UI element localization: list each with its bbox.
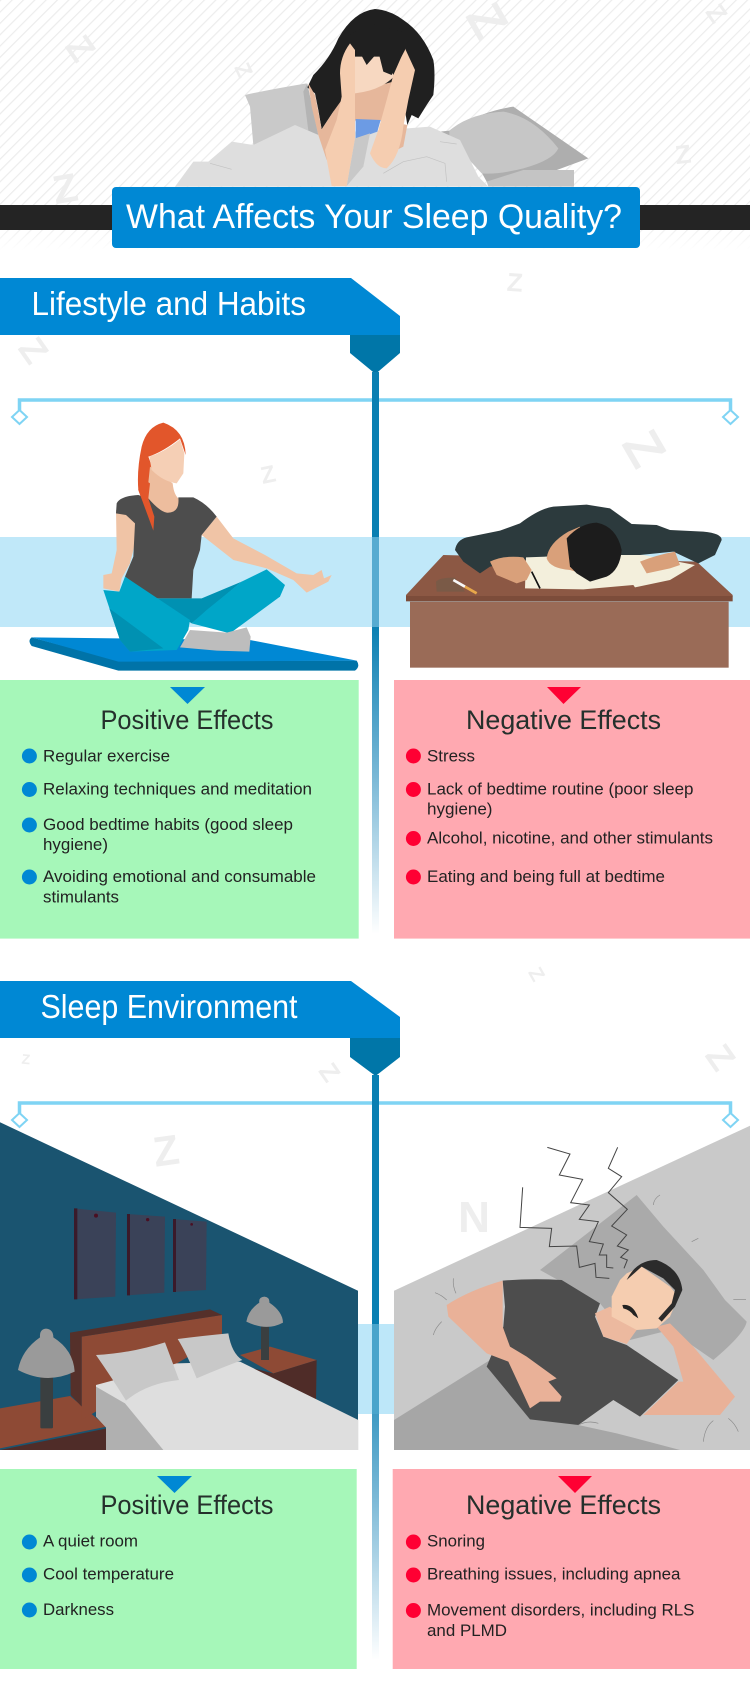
header hatched background: [0, 0, 750, 250]
list: [22, 748, 316, 906]
headboard: [70, 1309, 222, 1420]
background sleep Z marks: Z: [49, 166, 81, 213]
face: [612, 1267, 678, 1330]
branch connector: section 2: [12, 1103, 738, 1127]
pillow: [540, 1195, 747, 1360]
list: Cool temperature: [43, 1566, 174, 1584]
light blue band: section 1: [0, 537, 750, 627]
background sleep Z marks: Z: [610, 421, 677, 477]
snore lines: [520, 1147, 628, 1278]
list: Darkness: [43, 1601, 114, 1619]
sheet shadows: [347, 133, 370, 186]
face: [355, 57, 394, 93]
right pillow: [440, 107, 588, 182]
list: Stress: [427, 748, 475, 766]
right nightstand: [240, 1347, 317, 1400]
list: [22, 1533, 174, 1619]
list: Alcohol, nicotine, and other stimulants: [427, 829, 713, 847]
mouth: [622, 1305, 638, 1318]
bedding: [175, 125, 488, 187]
hair: [627, 1260, 682, 1322]
wall: [0, 1122, 358, 1450]
face: [149, 439, 184, 483]
background sleep Z marks: Z: [313, 1057, 347, 1087]
list: [406, 1533, 694, 1640]
hair: [567, 523, 622, 582]
sheet creases: [433, 1195, 746, 1442]
neck: [595, 1307, 637, 1344]
pen: [532, 572, 540, 588]
section heading: Lifestyle and Habits: Lifestyle and Habits: [32, 285, 306, 322]
list: Lack of bedtime routine (poor sleep: [427, 780, 694, 798]
shirt: [487, 1279, 678, 1425]
right arm: [370, 48, 415, 168]
central timeline line: section 1: [372, 372, 379, 934]
list: Good bedtime habits (good sleep: [43, 816, 293, 834]
list: Breathing issues, including apnea: [427, 1566, 681, 1584]
back hair: [307, 9, 434, 129]
pointer triangle: [170, 687, 205, 704]
illustration: woman meditating on a mat: [29, 423, 358, 671]
illustration: dark quiet bedroom: [0, 1122, 358, 1450]
arm on belly: [447, 1281, 562, 1408]
section heading: Sleep Environment: Sleep Environment: [40, 988, 298, 1025]
blanket: [394, 1360, 680, 1450]
illustration: woman in bed holding her head: [175, 9, 588, 187]
list: hygiene): [427, 801, 492, 819]
ashtray and cigarette: [436, 578, 477, 593]
background sleep Z marks: [11, 0, 744, 1242]
pointer triangle: [547, 687, 581, 704]
background sleep Z marks: Z: [674, 139, 693, 170]
panel: lifestyle positive effects: [0, 680, 359, 939]
title banner: What Affects Your Sleep Quality?: [126, 198, 622, 236]
section heading: Lifestyle and Habits: [0, 278, 400, 374]
left arm: [325, 43, 355, 186]
list: Relaxing techniques and meditation: [43, 780, 312, 798]
heading: Positive Effects: [100, 705, 274, 735]
background sleep Z marks: Z: [229, 59, 258, 82]
bed background: [394, 1126, 750, 1450]
bedding creases: [210, 142, 457, 182]
list: A quiet room: [43, 1533, 138, 1551]
left arm: [103, 510, 137, 592]
list: Avoiding emotional and consumable: [43, 868, 316, 886]
list: and PLMD: [427, 1622, 507, 1640]
shirt: [116, 495, 217, 598]
background sleep Z marks: Z: [523, 964, 549, 985]
heading: Negative Effects: [466, 1490, 661, 1520]
background sleep Z marks: Z: [150, 1126, 182, 1176]
left pillow: [245, 83, 318, 145]
background sleep Z marks: Z: [11, 329, 57, 371]
legs: [103, 569, 285, 652]
pillows: [96, 1333, 242, 1401]
section heading: Sleep Environment: [0, 981, 400, 1076]
list: hygiene): [43, 836, 108, 854]
list: Eating and being full at bedtime: [427, 868, 665, 886]
heading: Negative Effects: [466, 705, 661, 735]
right hand: [640, 552, 680, 573]
list: Regular exercise: [43, 748, 170, 766]
neck: [147, 467, 181, 515]
pointer triangle: [558, 1476, 592, 1493]
central line over band: [372, 537, 379, 627]
illustration: man snoring in bed: [394, 1126, 750, 1450]
desk front: [410, 602, 729, 668]
background sleep Z marks: Z: [21, 1051, 31, 1067]
bed: [96, 1362, 358, 1450]
right lamp: [246, 1297, 283, 1360]
illustration: man asleep at desk: [406, 505, 733, 668]
central line over band section 2: [372, 1324, 379, 1414]
list: Snoring: [427, 1533, 485, 1551]
list: [406, 748, 713, 886]
central timeline line: section 2: [372, 1075, 379, 1660]
heading: Positive Effects: [100, 1490, 274, 1520]
blue top: [356, 119, 381, 139]
background sleep Z marks: Z: [698, 1036, 744, 1078]
left hand: [490, 557, 532, 583]
title banner: [112, 187, 640, 248]
list: Movement disorders, including RLS: [427, 1602, 694, 1620]
open book: [525, 555, 695, 589]
wall pictures: [74, 1208, 207, 1299]
panel: environment negative effects: [393, 1469, 750, 1669]
desk top: [406, 555, 733, 601]
central line over connector: [372, 372, 379, 537]
central line over connector section 2: [372, 1075, 379, 1255]
arm behind head: [643, 1323, 735, 1415]
hair: [138, 423, 186, 531]
background sleep Z marks: Z: [58, 27, 104, 69]
foot: [180, 627, 251, 652]
shoulders and neck: [308, 82, 407, 160]
light blue band: section 2: [358, 1324, 394, 1414]
panel: lifestyle negative effects: [394, 680, 750, 939]
branch connector: section 1: [12, 400, 738, 424]
panel: environment positive effects: [0, 1469, 357, 1669]
dark header bar: [0, 205, 750, 230]
background sleep Z marks: Z: [258, 460, 278, 490]
hair strand: [138, 477, 154, 531]
jacket: [455, 505, 722, 573]
left lamp: [18, 1329, 75, 1428]
mat: [29, 637, 358, 671]
head: [547, 527, 587, 575]
left nightstand: [0, 1396, 107, 1450]
list: stimulants: [43, 888, 119, 906]
background sleep Z marks: Z: [506, 267, 524, 298]
background sleep Z marks: N: [458, 1193, 490, 1242]
right arm: [202, 517, 332, 593]
pointer triangle: [157, 1476, 192, 1493]
fringe: [347, 23, 408, 75]
